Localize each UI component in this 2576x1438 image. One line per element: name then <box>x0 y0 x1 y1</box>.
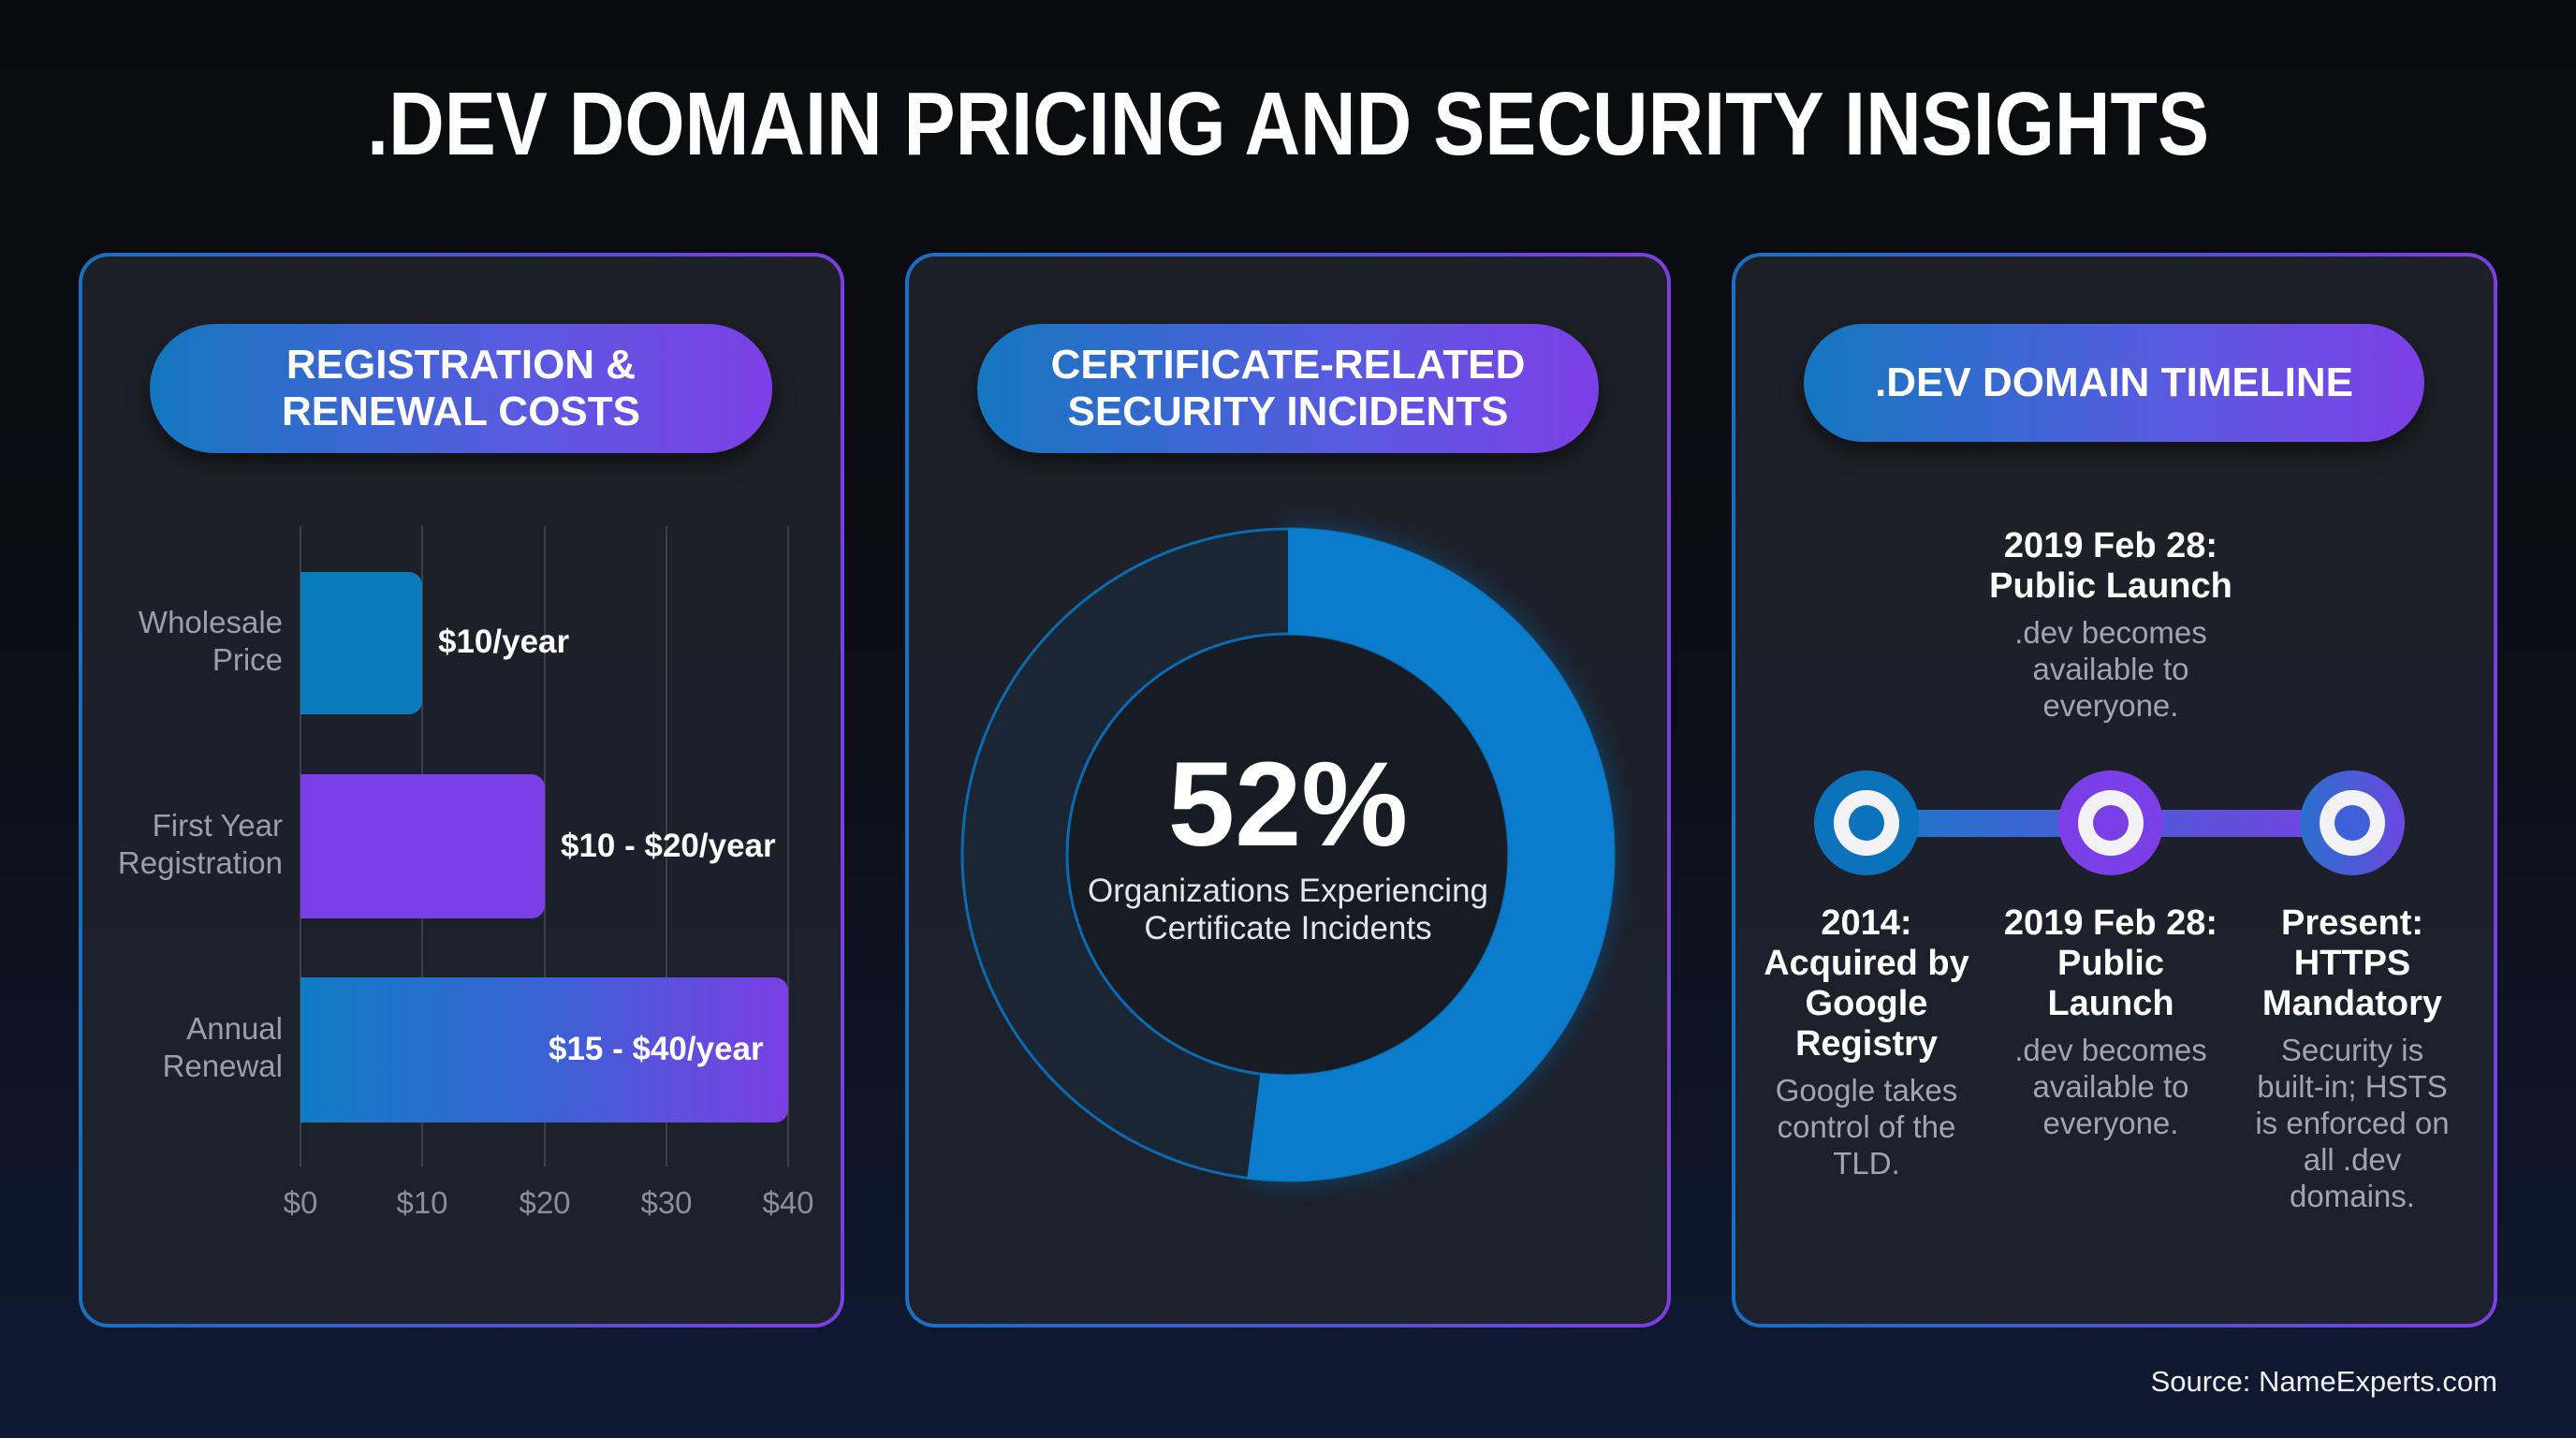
timeline: 2014: Acquired by <box>1764 944 1969 983</box>
timeline: present <box>2255 903 2450 1213</box>
timeline: 2019: everyone. <box>2043 1106 2178 1140</box>
callout: public launch above <box>1989 526 2232 723</box>
timeline: present: Mandatory <box>2262 984 2442 1023</box>
timeline: 2019: available to <box>2033 1069 2188 1104</box>
timeline: present: Present: <box>2281 903 2423 943</box>
timeline: 2019: .dev becomes <box>2014 1033 2207 1067</box>
bar chart: $15 - $40/year <box>549 1031 764 1067</box>
bar chart: $30 <box>640 1185 693 1220</box>
timeline: 2014: Google <box>1806 984 1927 1023</box>
panel: security incidents <box>905 253 1671 1328</box>
source: Source: NameExperts.com <box>2151 1365 2497 1398</box>
timeline track with nodes <box>1814 770 2405 875</box>
heading: registration & renewal costs: REGISTRATION & <box>286 342 636 388</box>
bar chart: $10/year <box>438 624 569 660</box>
bar chart: Annual <box>186 1011 283 1046</box>
stat caption: Organizations Experiencing <box>1088 873 1488 909</box>
timeline: 2014: TLD. <box>1833 1146 1900 1181</box>
bar chart: Registration <box>118 845 283 880</box>
timeline: present: is enforced on <box>2255 1106 2450 1140</box>
bar chart: $40 <box>762 1185 814 1220</box>
bar chart: Price <box>212 642 283 677</box>
stat caption: Certificate Incidents <box>1144 910 1432 946</box>
timeline: 2019 <box>2004 903 2217 1140</box>
bar chart: $10 - $20/year <box>561 828 776 864</box>
timeline: 2019: Public <box>2057 944 2164 983</box>
callout: public launch above: .dev becomes <box>2014 615 2207 650</box>
bar chart: $10 <box>396 1185 448 1220</box>
callout: public launch above: everyone. <box>2043 688 2178 723</box>
bar chart: $0 <box>284 1185 317 1220</box>
timeline: 2019: Launch <box>2047 984 2174 1023</box>
timeline: 2014: control of the <box>1778 1109 1955 1144</box>
heading: certificate-related security incidents <box>977 324 1599 453</box>
timeline: present: built-in; HSTS <box>2257 1069 2448 1104</box>
heading: registration & renewal costs: RENEWAL COSTS <box>282 389 640 434</box>
bar chart: Renewal <box>163 1049 283 1083</box>
title: .DEV DOMAIN PRICING AND SECURITY INSIGHTS <box>367 74 2209 174</box>
timeline: 2019: 2019 Feb 28: <box>2004 903 2217 943</box>
callout: public launch above: 2019 Feb 28: <box>2004 526 2217 565</box>
timeline: 2014: Registry <box>1795 1024 1938 1064</box>
heading: certificate-related security incidents: SECURITY INCIDENTS <box>1067 389 1509 434</box>
heading: .dev domain timeline <box>1804 324 2424 442</box>
heading: certificate-related security incidents: CERTIFICATE-RELATED <box>1051 342 1525 388</box>
timeline: 2014 <box>1764 903 1969 1181</box>
donut chart <box>960 515 1629 1196</box>
callout: public launch above: available to <box>2033 652 2188 686</box>
heading: registration & renewal costs <box>150 324 772 453</box>
bar chart: Wholesale <box>139 605 283 639</box>
stat: 52%: 52% <box>1168 738 1408 872</box>
stat caption <box>1088 873 1488 946</box>
timeline: present: Security is <box>2281 1033 2423 1067</box>
timeline: 2014: 2014: <box>1821 903 1912 943</box>
callout: public launch above: Public Launch <box>1989 566 2232 606</box>
panel: timeline <box>1732 253 2497 1328</box>
timeline: present: all .dev <box>2304 1142 2401 1177</box>
bar chart: $20 <box>519 1185 571 1220</box>
heading: .dev domain timeline: .DEV DOMAIN TIMELINE <box>1875 360 2353 405</box>
bar chart: First Year <box>153 808 283 843</box>
panel: registration costs <box>79 253 844 1328</box>
timeline: 2014: Google takes <box>1776 1073 1957 1108</box>
timeline: present: domains. <box>2290 1179 2415 1213</box>
timeline: present: HTTPS <box>2294 944 2410 983</box>
